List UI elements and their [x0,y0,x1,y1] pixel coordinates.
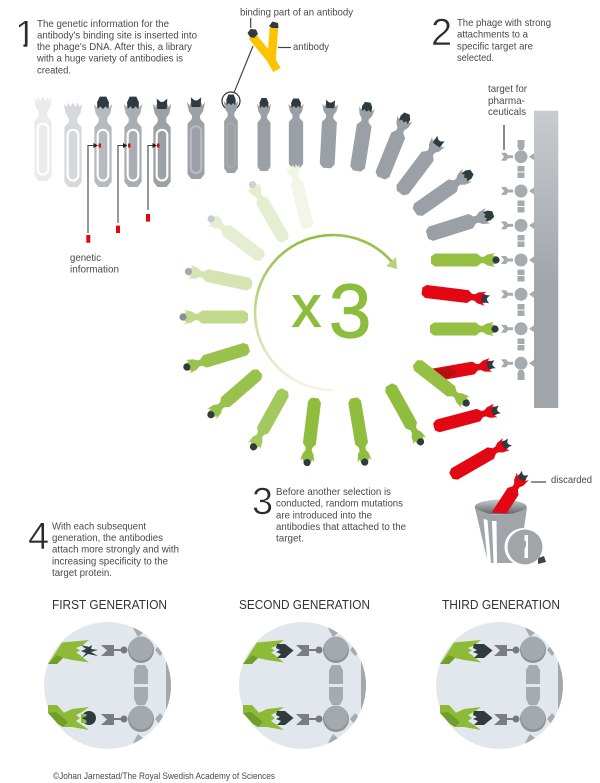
step 3 text: conducted, random mutations [276,498,403,510]
multiplier label x3: x [292,274,321,340]
step 2 text: selected. [457,52,494,64]
cycle arrow [255,235,397,390]
step 2 number: 2 [431,12,452,54]
label: target for pharmaceuticals: target for [488,83,527,95]
step 3 text: are introduced into the [276,509,372,521]
step 1 text: with a huge variety of antibodies is [36,53,183,65]
step 2 text: specific target are [457,40,533,52]
step 3 text [276,486,406,545]
phages: mutated green fading cycle [179,163,428,467]
multiplier label x3 [292,270,371,354]
heading: second generation: SECOND GENERATION [239,597,370,612]
step 3 text: target. [276,533,304,545]
step 1 number: 1 [15,14,36,56]
icon: yellow antibody with callouts: binding part of an antibody [240,6,354,18]
label: target for pharmaceuticals: pharma- [488,95,525,107]
step 1 text: the phage's DNA. After this, a library [37,41,193,53]
step 2 text: The phage with strong [457,17,551,29]
step 2 text [457,17,551,64]
step 1 text: The genetic information for the [37,18,169,30]
icon: yellow antibody with callouts [222,6,354,110]
step 1 text: created. [37,64,71,76]
step 4 text: generation, the antibodies [52,532,163,544]
step 2 text: attachments to a [457,29,528,41]
label: target for pharmaceuticals: ceuticals [488,106,526,118]
heading: third generation: THIRD GENERATION [442,597,560,612]
label: genetic information [70,252,119,276]
step 4 number: 4 [28,516,49,558]
step 3 text: antibodies that attached to the [276,521,406,533]
icon: trash bin with discarded phage [475,469,546,566]
step 4 text: With each subsequent [52,520,146,532]
phages: top library row in grey [34,94,496,243]
step 4 text [52,520,179,579]
target column for pharmaceuticals [501,111,558,408]
phages: selection, bound green and unbound red [411,253,513,482]
icon: yellow antibody with callouts: antibody [293,41,330,53]
step 1 text: antibody's binding site is inserted into [37,30,197,42]
multiplier label x3: 3 [329,270,371,354]
panel: second generation [239,622,367,749]
credit line: ©Johan Jarnestad/The Royal Swedish Academy of Sciences [53,771,275,782]
panel: third generation [436,622,564,749]
label: discarded: discarded [551,474,592,486]
step 3 number: 3 [252,481,273,523]
step 4 text: increasing specificity to the [52,555,168,567]
label: discarded [531,474,592,486]
heading: first generation: FIRST GENERATION [52,597,167,612]
label: genetic information: information [70,264,119,276]
panel: first generation [44,622,172,749]
step 4 text: target protein. [52,567,112,579]
step 4 text: attach more strongly and with [52,544,179,556]
genetic information arrows and red inserts [86,143,160,243]
step 1 text [36,18,197,76]
step 3 text: Before another selection is [276,486,391,498]
label: genetic information: genetic [70,252,101,264]
label: target for pharmaceuticals [488,83,527,150]
